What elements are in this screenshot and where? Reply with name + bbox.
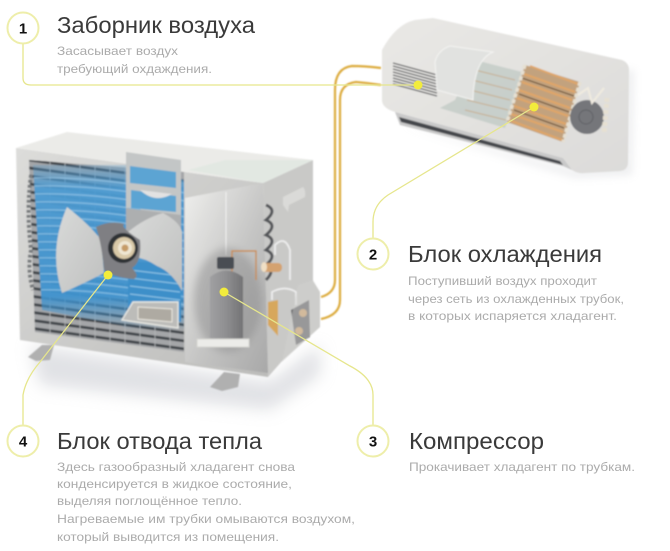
centre strip	[126, 152, 181, 215]
refrigerant pipes	[321, 66, 381, 319]
intake grille	[393, 63, 437, 96]
callout 1: air intake: требующий охдаждения.	[57, 62, 212, 76]
silver tubes	[272, 241, 296, 305]
callout 2: cooling block: через сеть из охлажденных трубок,	[408, 292, 624, 306]
callout 4: heat rejection block: который выводится из помещения.	[57, 530, 279, 544]
unit feet	[28, 345, 240, 391]
callout 2: cooling block: Поступивший воздух проходит	[408, 274, 598, 288]
callout 4: heat rejection block: выделяя поглощённое тепло.	[57, 494, 242, 508]
end plate	[604, 98, 607, 134]
callout 2: cooling block: Блок охлаждения	[408, 241, 602, 267]
callout 3: compressor: 3	[369, 434, 377, 450]
evaporator coil	[507, 65, 580, 142]
callout 1: air intake	[8, 12, 255, 76]
callout 4: heat rejection block	[8, 426, 355, 544]
side vent	[283, 187, 305, 212]
leader 1	[23, 41, 418, 85]
side coil	[266, 205, 272, 280]
leader 4	[23, 275, 108, 428]
callout 2: cooling block	[358, 238, 624, 323]
callout 4: heat rejection block: Блок отвода тепла	[57, 428, 262, 454]
compressor	[197, 257, 249, 347]
panel shadow around compressor	[194, 248, 262, 352]
fan bracket	[122, 302, 178, 328]
blue heat exchanger	[32, 164, 185, 328]
indoor body	[382, 18, 629, 173]
callout 2: cooling block: в которых испаряется хладагент.	[408, 309, 617, 323]
yellow leader lines	[23, 41, 534, 428]
copper pipe frame	[232, 251, 256, 280]
callout 1: air intake: Засасывает воздух	[57, 44, 178, 58]
fan hub	[108, 233, 138, 263]
front face	[16, 148, 268, 377]
leader 2	[373, 107, 534, 241]
side panel cover	[282, 280, 320, 362]
copper stub	[262, 263, 282, 272]
air outlet	[395, 112, 572, 170]
condenser grille	[28, 159, 185, 352]
leader 3	[224, 292, 373, 428]
motor	[570, 100, 604, 134]
leader dots	[104, 80, 538, 296]
valve block	[268, 300, 310, 345]
top face	[16, 132, 313, 183]
callout 4: heat rejection block: Здесь газообразный хладагент снова	[57, 460, 295, 474]
callout 4: heat rejection block: Нагреваемые им трубки омываются воздухом,	[57, 512, 355, 526]
filter cover	[435, 46, 493, 100]
callout 3: compressor	[358, 426, 635, 474]
coil edge	[28, 175, 33, 290]
callout 2: cooling block: 2	[369, 246, 377, 264]
wall shadow	[400, 70, 634, 178]
illustration: outdoor unit	[16, 132, 320, 410]
callout 1: air intake: Заборник воздуха	[57, 12, 255, 38]
callout 1: air intake: 1	[19, 20, 27, 38]
fan blades	[56, 207, 182, 293]
filter mesh	[440, 60, 522, 128]
side face	[263, 160, 320, 377]
callout 4: heat rejection block: конденсируется в жидкое состояние,	[57, 477, 292, 491]
callout 3: compressor: Компрессор	[409, 428, 544, 454]
compressor compartment panel	[185, 183, 268, 373]
callout 4: heat rejection block: 4	[19, 434, 28, 450]
callout 3: compressor: Прокачивает хладагент по трубкам.	[409, 460, 635, 474]
ground shadow	[30, 345, 320, 410]
illustration: indoor unit	[382, 18, 634, 178]
